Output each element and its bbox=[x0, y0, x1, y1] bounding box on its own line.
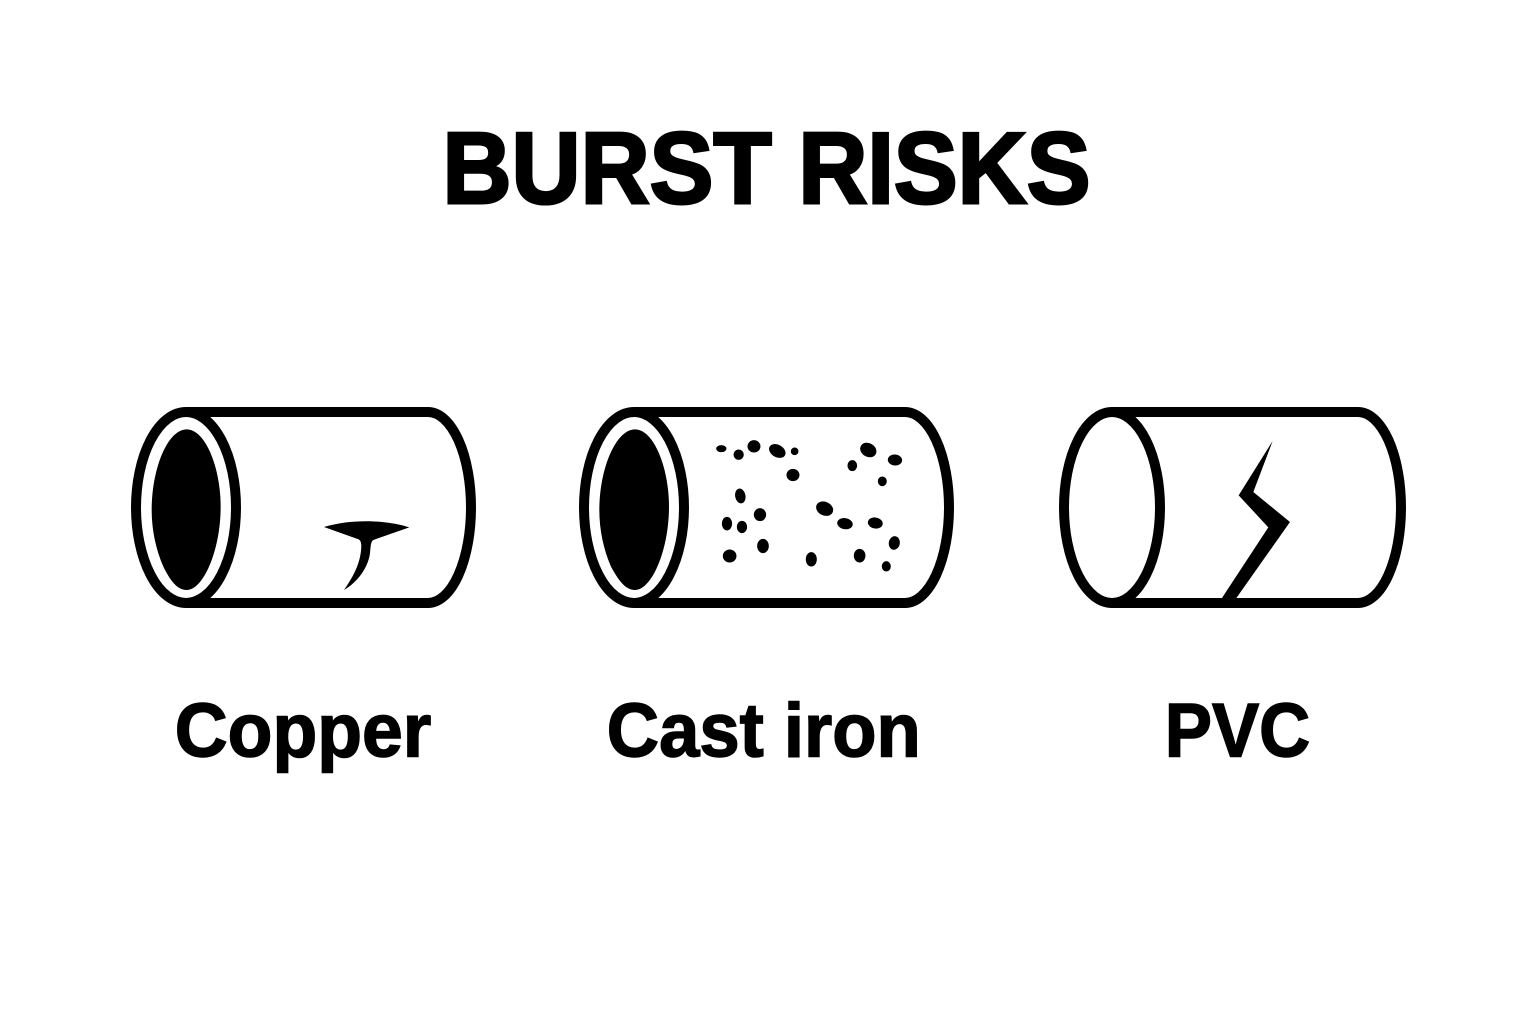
title: BURST RISKS bbox=[442, 113, 1090, 225]
icon: copper pinhole split crack bbox=[324, 521, 409, 590]
icon: corrosion pits bbox=[717, 441, 902, 571]
icon: cast iron pipe dark interior bbox=[599, 429, 669, 590]
label: cast iron: Cast iron bbox=[607, 688, 921, 774]
label: pvc: PVC bbox=[1165, 688, 1310, 774]
label: copper: Copper bbox=[175, 688, 431, 774]
icon: pvc jagged crack bbox=[1221, 441, 1290, 600]
icon: cast iron pipe opening rim bbox=[584, 412, 684, 603]
icon: copper pipe body bbox=[186, 412, 471, 603]
icon: pvc pipe opening rim bbox=[1064, 412, 1160, 603]
panel: cast iron bbox=[584, 412, 949, 774]
panel: copper bbox=[136, 412, 471, 774]
icon: copper pipe dark interior bbox=[152, 429, 221, 590]
icon: cast iron pipe body bbox=[634, 412, 949, 603]
icon: copper pipe opening rim bbox=[136, 412, 236, 603]
icon: pvc pipe body bbox=[1112, 412, 1401, 603]
panel: pvc bbox=[1064, 412, 1401, 774]
